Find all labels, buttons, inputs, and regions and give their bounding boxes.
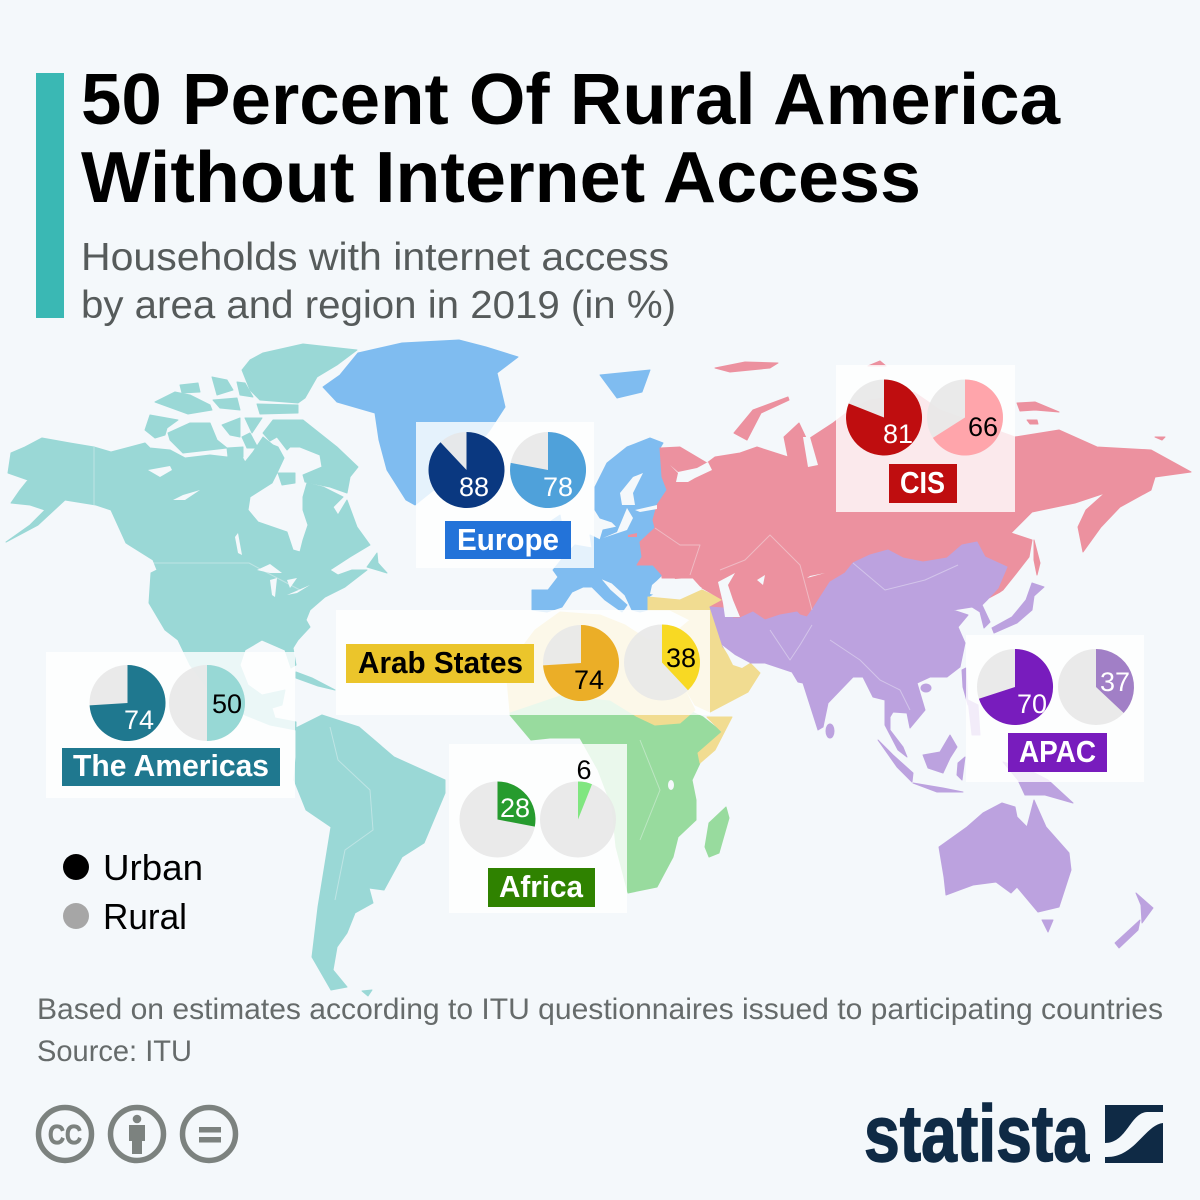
pie: CIS urban 81: 81: [883, 419, 913, 449]
pie: Europe rural 78: [510, 432, 586, 508]
subtitle: [81, 236, 676, 327]
pie: Europe rural 78: 78: [543, 472, 573, 502]
region: the Americas: [6, 344, 445, 996]
pie: Arab States urban 74: [543, 625, 619, 701]
panel: Africa: [449, 744, 627, 913]
pie: Europe urban 88: 88: [459, 472, 489, 502]
title: 50 Percent Of Rural America: [81, 60, 1061, 140]
icon: creative commons: CC: [48, 1119, 82, 1150]
footnote and source: [37, 993, 1163, 1068]
pie: Arab States rural 38: 38: [666, 643, 696, 673]
pie: Americas rural 50: [169, 665, 245, 741]
region: APAC: [710, 542, 1153, 948]
subtitle: by area and region in 2019 (in %): [81, 284, 676, 327]
legend: [63, 847, 203, 937]
country borders: [94, 447, 958, 900]
label: The Americas: The Americas: [73, 748, 269, 783]
pie: Arab States urban 74: 74: [574, 665, 604, 695]
pie: CIS urban 81: [846, 380, 922, 456]
enclave: Kaliningrad: [628, 533, 637, 537]
world map: [6, 340, 1191, 996]
enclave: Crimea: [673, 572, 692, 579]
footnote and source: Source: ITU: [37, 1035, 192, 1068]
pie: APAC rural 37: 37: [1100, 667, 1130, 697]
label: APAC: APAC: [1019, 734, 1096, 769]
pie: APAC urban 70: 70: [1017, 689, 1047, 719]
pie: APAC urban 70: [977, 649, 1053, 725]
panel: The Americas: [46, 652, 295, 798]
pie: Americas urban 74: 74: [124, 705, 154, 735]
pie: Europe urban 88: [428, 432, 505, 508]
icon: attribution person: [110, 1108, 164, 1160]
pie: CIS rural 66: 66: [968, 412, 998, 442]
label: CIS: CIS: [900, 465, 945, 500]
panel: Arab States: [336, 610, 710, 715]
legend item: rural: Rural: [103, 896, 187, 937]
icon: creative commons: [38, 1108, 92, 1160]
label: Europe: Europe: [457, 522, 559, 557]
accent bar: [36, 73, 64, 318]
region: Europe: [323, 340, 667, 612]
pie: APAC rural 37: [1058, 649, 1134, 725]
panel: Europe: [416, 422, 594, 568]
panel: APAC: [966, 635, 1144, 782]
region: CIS: [637, 361, 1191, 640]
label: Arab States: Arab States: [358, 645, 523, 680]
pie: CIS rural 66: [927, 380, 1003, 456]
icon: no derivatives equals: [182, 1108, 236, 1160]
pie: Americas rural 50: 50: [212, 689, 242, 719]
pie: Africa rural 6: [540, 755, 616, 858]
pie: Africa urban 28: 28: [500, 793, 530, 823]
footnote and source: Based on estimates according to ITU questionnaires issued to participating countries: [37, 993, 1163, 1026]
label: CIS: [889, 464, 957, 503]
legend item: urban: Urban: [103, 847, 203, 888]
subtitle: Households with internet access: [81, 236, 669, 279]
pie: Africa urban 28: [460, 782, 536, 858]
icon: statista logo: [1105, 1105, 1163, 1163]
region: Arab States: [507, 590, 760, 763]
pie: Americas urban 74: [90, 665, 166, 741]
region: Africa: [510, 695, 729, 893]
pie: Arab States rural 38: [624, 624, 700, 700]
pie: Africa rural 6: 6: [576, 755, 592, 785]
statista wordmark: statista: [864, 1089, 1089, 1178]
title: Without Internet Access: [81, 138, 921, 218]
panel: CIS: [836, 365, 1015, 512]
label: Africa: Africa: [499, 869, 584, 904]
title: [81, 60, 1061, 218]
lakes and inland seas: [148, 437, 825, 790]
